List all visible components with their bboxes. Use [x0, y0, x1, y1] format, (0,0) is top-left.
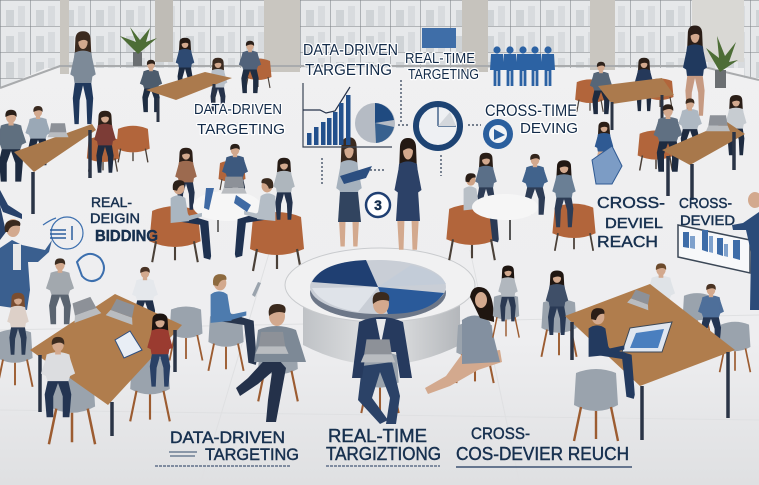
heading: cross-deviel reach: REACH: [597, 234, 658, 251]
dotted connectors: [322, 80, 481, 186]
heading: cross-deviel reach: CROSS-: [597, 195, 665, 212]
pie chart: [355, 103, 395, 143]
icon: bidding sketch circle: [43, 217, 104, 281]
group: left table: [0, 106, 150, 214]
heading: cross-time deving: DEVING: [520, 120, 578, 137]
number badge: 3: 3: [374, 197, 382, 213]
caption: real-time targizting: TARGIZTIONG: [326, 444, 441, 464]
seated man with laptop: front centre: [352, 292, 412, 424]
heading: real-time targeting: TARGETING: [408, 66, 479, 83]
plant: left: [120, 27, 157, 66]
heading: data-driven targeting (top): [303, 42, 398, 79]
group: top-left table: [140, 38, 272, 122]
heading: cross-devied: [679, 195, 735, 228]
number badge: 3: [366, 193, 390, 217]
seated woman: front right: [425, 287, 502, 394]
heading: cross-devied: CROSS-: [679, 195, 732, 212]
group: centre round table: [149, 144, 304, 271]
woman with blue chair: right centre: [592, 122, 622, 184]
central pedestal with pie chart: [285, 248, 475, 365]
heading: real-design bidding: BIDDING: [95, 228, 158, 245]
caption: real-time targizting: [326, 426, 441, 466]
heading: cross-time deving: [485, 102, 578, 137]
caption: real-time targizting: REAL-TIME: [328, 426, 427, 446]
presenter: far left: [0, 219, 52, 310]
group: bottom-right table: [541, 263, 750, 441]
heading: cross-deviel reach: DEVIEL: [605, 215, 663, 232]
person walking: far left: [0, 190, 22, 240]
heading: data-driven targeting (left): DATA-DRIVEN: [194, 101, 282, 118]
heading: real-time targeting: REAL-TIME: [405, 50, 475, 67]
presenter: far right: [732, 192, 759, 310]
clock icon: [416, 104, 460, 148]
icon: five people: [490, 46, 555, 86]
icon: eye target: [483, 119, 513, 149]
caption: data-driven targeting: DATA-DRIVEN: [170, 428, 285, 447]
group: right table: [638, 95, 746, 200]
group: top-right table: [575, 58, 674, 130]
heading: real-time targeting: [405, 50, 479, 83]
heading: data-driven targeting (top): TARGETING: [305, 62, 392, 79]
bar chart with trend line: [303, 83, 392, 147]
caption: data-driven targeting: TARGETING: [205, 445, 299, 464]
seated man with tablet: centre left: [208, 274, 261, 371]
heading: real-design bidding: [90, 195, 158, 245]
heading: data-driven targeting (left): TARGETING: [197, 121, 285, 138]
heading: real-design bidding: REAL-: [91, 195, 132, 210]
caption: data-driven targeting: [155, 428, 299, 466]
heading: data-driven targeting (top): DATA-DRIVEN: [303, 42, 398, 59]
seated man with laptop: front left: [236, 304, 306, 422]
heading: cross-deviel reach: [597, 195, 665, 251]
heading: real-design bidding: DEIGIN: [90, 211, 140, 226]
caption: cross-device reach: COS-DEVIER REUCH: [456, 444, 629, 464]
group: right round table: [446, 153, 596, 260]
heading: data-driven targeting (left): [194, 101, 285, 138]
woman in grey: right of pedestal: [493, 266, 519, 338]
heading: cross-devied: DEVIED: [680, 212, 735, 228]
heading: cross-time deving: CROSS-TIME: [485, 102, 577, 120]
caption: cross-device reach: [456, 424, 632, 467]
whiteboard chart: right: [678, 225, 750, 273]
standing woman: top right: [683, 26, 707, 116]
group: bottom-left table: [0, 258, 203, 444]
caption: cross-device reach: CROSS-: [471, 424, 530, 443]
standing woman: top left: [70, 31, 96, 124]
standing women in centre: [336, 137, 422, 250]
plant: right: [706, 36, 738, 88]
